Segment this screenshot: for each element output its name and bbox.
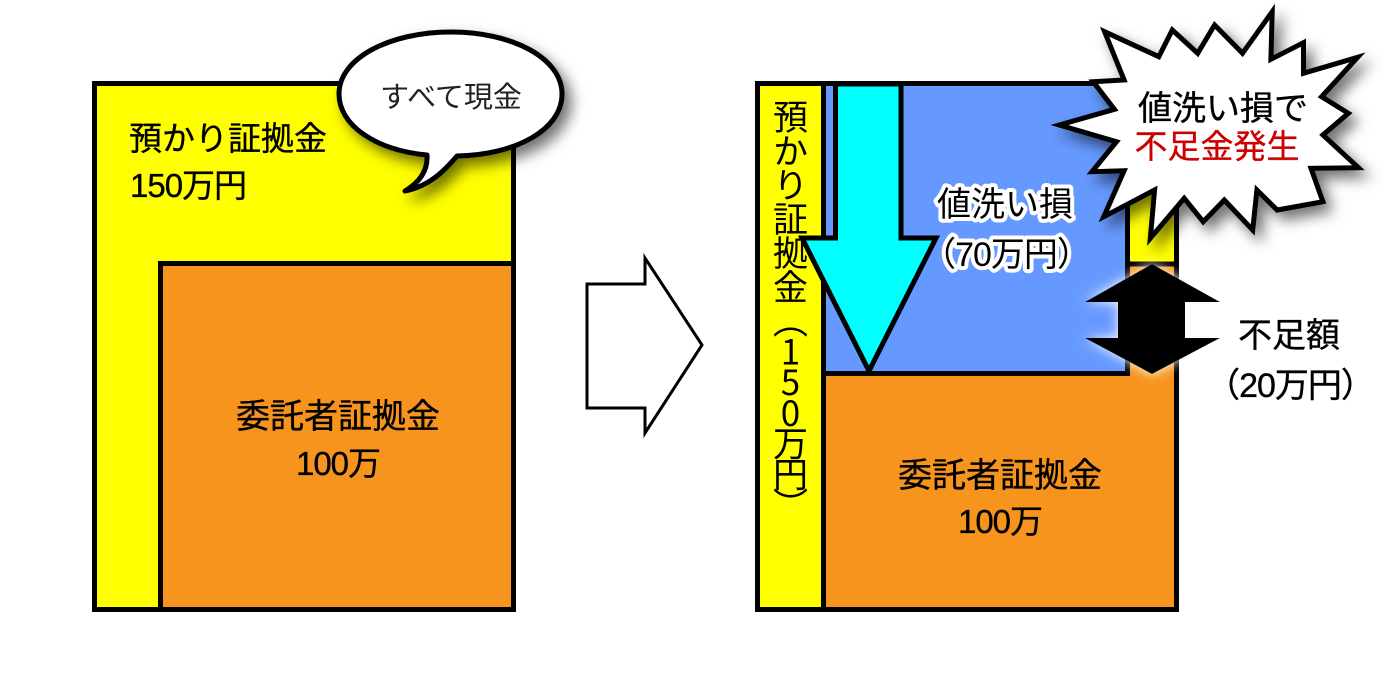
customer margin label	[898, 457, 1102, 540]
panel: after, deposit box	[758, 84, 1176, 610]
customer margin label: 委託者証拠金	[236, 398, 440, 436]
customer margin label: 100万	[958, 503, 1042, 540]
deposit label: 預かり証拠金	[129, 120, 327, 157]
burst callout	[1059, 12, 1358, 238]
deposit label: 150万円	[130, 167, 246, 204]
valuation loss label: （70万円）	[922, 236, 1090, 274]
burst shape	[1059, 12, 1358, 238]
shortfall label: 不足額	[1238, 317, 1340, 355]
bubble shape	[339, 32, 562, 191]
vertical deposit label: 預かり証拠金 （150万円）	[765, 99, 816, 518]
yellow outer rectangle	[758, 84, 1176, 610]
burst text line 1: 値洗い損で	[1138, 90, 1308, 128]
panel: before, deposit box	[94, 84, 514, 610]
yellow deposit rectangle	[94, 84, 514, 610]
arrow: transition right	[587, 258, 702, 433]
valuation loss label: 値洗い損	[937, 186, 1073, 224]
speech bubble: all cash	[339, 32, 562, 191]
orange customer margin rectangle	[160, 264, 514, 610]
arrow: cyan down arrow	[802, 84, 936, 371]
customer margin label: 委託者証拠金	[898, 457, 1102, 495]
customer margin label: 100万	[296, 445, 380, 482]
shortfall label: （20万円）	[1206, 367, 1374, 405]
blue valuation loss rectangle	[824, 84, 1128, 374]
shortfall label	[1206, 317, 1374, 405]
bubble text: すべて現金	[380, 81, 522, 114]
yellow remaining strip	[1130, 86, 1174, 261]
customer margin label	[236, 398, 440, 482]
valuation loss label	[922, 186, 1090, 274]
burst text line 2: 不足金発生	[1134, 128, 1300, 165]
deposit label	[129, 120, 327, 204]
orange customer margin rectangle	[824, 264, 1176, 610]
double arrow: shortfall	[1085, 264, 1220, 374]
